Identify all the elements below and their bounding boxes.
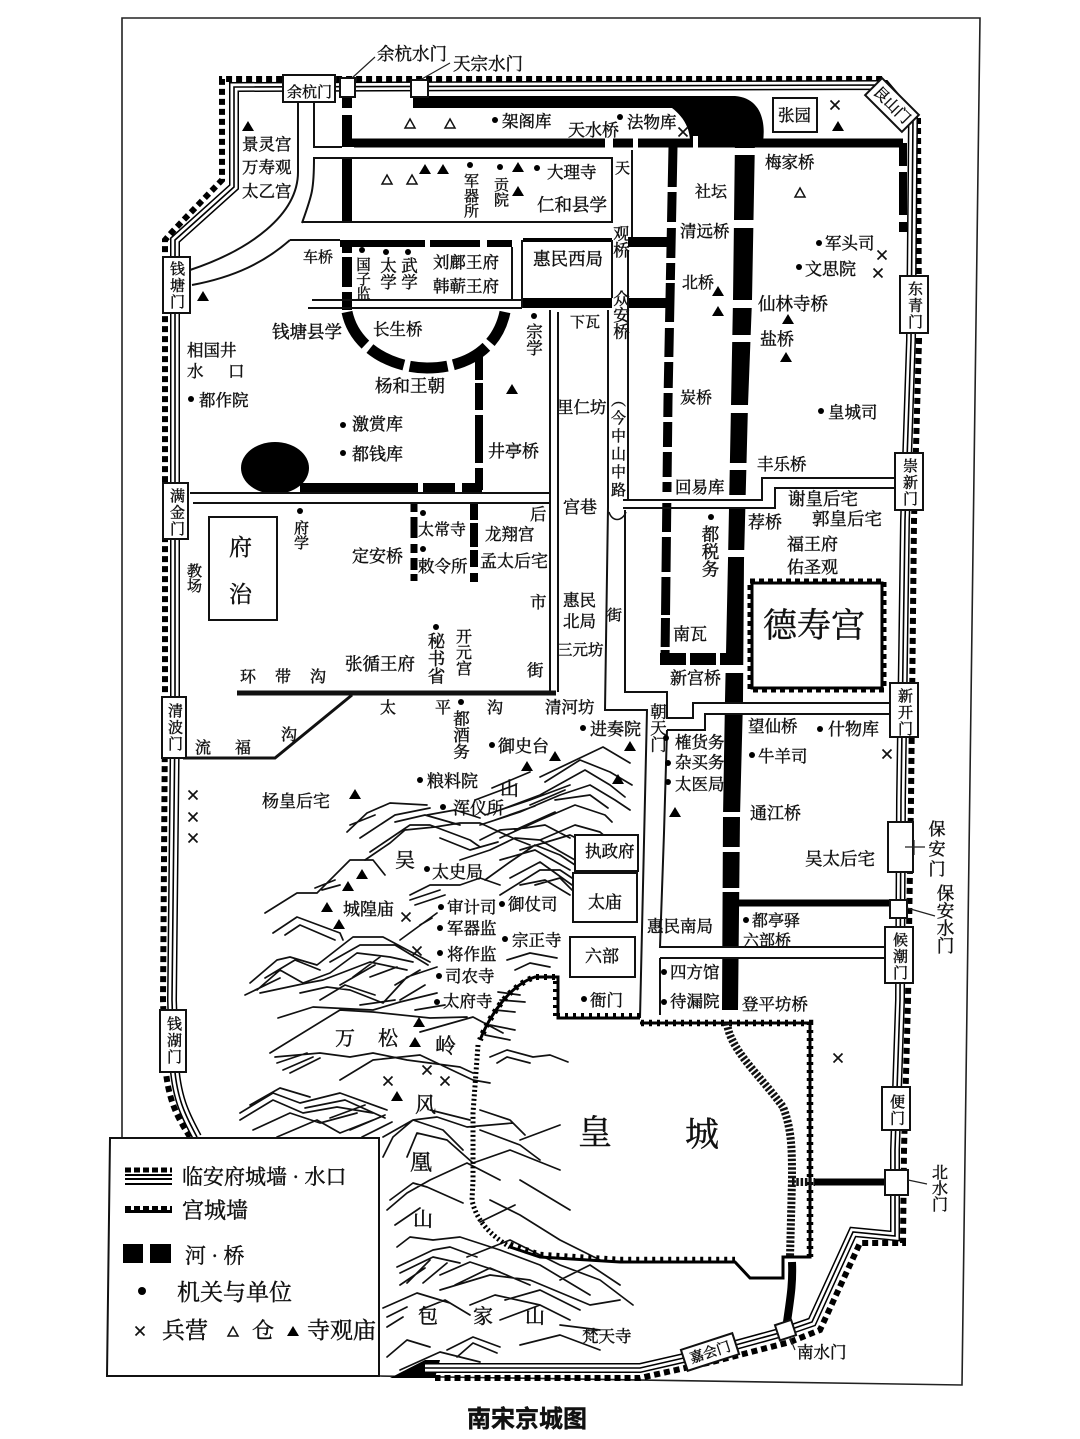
place names north block vertical: （今中山中路 (609, 392, 626, 500)
place names: north-east: 北桥 (682, 274, 714, 292)
place names: southern hills and palace: 梵天寺 (582, 1327, 632, 1346)
gate: baoan (888, 822, 913, 872)
river: west lake (241, 442, 309, 494)
place names: wu hill: 四方馆 (670, 963, 720, 982)
place names: west: 沟 (310, 668, 326, 686)
place names: west: 定安桥 (352, 547, 403, 566)
legend (107, 1138, 379, 1376)
label: dongqing gate: 东青门 (906, 281, 922, 330)
place names: north-east: 回易库 (675, 478, 724, 497)
river: east links (738, 903, 890, 1182)
box: liubu (570, 937, 635, 977)
river: north canal (352, 138, 903, 148)
place names: north (187, 106, 811, 517)
place names: north-east: 社坛 (695, 183, 728, 201)
place names: west: 孟太后宅 (480, 552, 548, 571)
title: 南宋京城图 (467, 1405, 587, 1433)
place names: central: 杂买务 (675, 753, 724, 772)
place names: west (185, 520, 548, 757)
place names: west: 太 (380, 699, 396, 717)
place names: west: 平 (435, 699, 451, 717)
place names north block horizontal: 车桥 (303, 248, 333, 266)
wall crenels west and north (163, 79, 885, 1137)
place names: central: 北局 (563, 612, 596, 631)
gate: genshan (865, 78, 919, 132)
water gate: yuhang (340, 78, 355, 97)
gates (160, 57, 935, 1371)
place names north block vertical: 贡院 (492, 177, 508, 207)
place names: central: 进奏院 (590, 720, 641, 739)
legend: granary (228, 1318, 274, 1343)
place names north block horizontal: 井亭桥 (488, 442, 539, 461)
place names: north-east (675, 153, 882, 532)
label: bian gate: 便门 (888, 1094, 904, 1127)
label: genshan gate: 艮山门 (870, 83, 914, 127)
palace wall (472, 977, 815, 1278)
label: chongxin gate: 崇新门 (901, 458, 918, 508)
place names: west: 府 (229, 535, 252, 560)
river: thin canal (523, 238, 612, 242)
place names: north-east: 皇城司 (828, 403, 878, 422)
map frame (122, 18, 980, 1385)
road: huandai ditch (237, 690, 556, 696)
place names north block horizontal: 下瓦 (570, 314, 600, 331)
gate: dongqing (900, 276, 928, 333)
wall centre line (172, 85, 913, 1368)
place names: central: 街 (607, 607, 622, 624)
place names: north-east: 军头司 (825, 234, 874, 253)
city wall (163, 79, 919, 1378)
place names: wu hill: 衙门 (590, 991, 623, 1010)
place names north block vertical: 太学 (378, 257, 397, 290)
box: taimiao (573, 873, 637, 922)
place names: north-east: 梅家桥 (765, 153, 814, 172)
river: upper cross canals (522, 242, 672, 303)
place names: west: 流 (195, 739, 211, 757)
river: south branch (474, 350, 479, 582)
road: crossing street (190, 310, 895, 692)
place names: southern hills and palace: 岭 (435, 1034, 456, 1058)
place names: wu hill: 执政府 (585, 842, 634, 861)
water gate: north (885, 1170, 908, 1195)
gate: bian (882, 1087, 910, 1130)
river: north-east canal (899, 143, 907, 232)
place names north block horizontal: 大理寺 (547, 163, 596, 182)
place names: west: 沟 (487, 699, 503, 717)
place names: central: 南瓦 (673, 625, 707, 644)
palace wall north-west crenels (480, 977, 640, 1040)
gate labels (165, 44, 955, 1367)
road: imperial street (605, 150, 890, 1018)
place names north block vertical: 武学 (398, 257, 418, 290)
place names: west: 龙翔宫 (485, 525, 534, 544)
place names north block horizontal: 架阁库 (502, 112, 552, 131)
mountain ridges: fenghuang hill (240, 1050, 568, 1170)
place names: wu hill: 宗正寺 (512, 931, 562, 950)
deshou palace crenels (750, 581, 884, 690)
river: south link (787, 1262, 792, 1322)
place names: central: 什物库 (828, 720, 879, 739)
place names: central: 街 (527, 661, 544, 680)
palace wall east crenels (510, 1023, 810, 1260)
river: lower link (660, 653, 738, 665)
palace inner wall (727, 1023, 792, 1257)
place names north block horizontal: 惠民西局 (533, 249, 603, 269)
water gate: tianzong (411, 80, 428, 97)
markers: institutions, barracks, granaries, temples (188, 100, 892, 1101)
place names: west: 张循王府 (345, 654, 415, 674)
place names north block vertical (354, 160, 630, 500)
place names north block horizontal: 刘鄜王府 (433, 253, 499, 272)
place names: wu hill: 审计司 (447, 898, 496, 917)
label: qianhu gate: 钱湖门 (165, 1016, 182, 1066)
place names: southern hills and palace: 风 (415, 1093, 436, 1117)
legend: palace wall text: 宫城墙 (182, 1198, 248, 1223)
water gate: south (775, 1320, 796, 1340)
place names: wu hill: 登平坊桥 (742, 995, 808, 1014)
deshou palace name: 德寿宫 (763, 607, 865, 645)
place names: west: 带 (275, 668, 291, 686)
label: baoan gate: 保安门 (926, 820, 945, 880)
place names north block vertical: 国子监 (354, 257, 370, 300)
place names north block vertical: 天 (613, 160, 630, 175)
road: street bubble (609, 512, 626, 520)
temple triangles (197, 121, 844, 1101)
place names: southern hills and palace: 包 (418, 1305, 438, 1328)
palace wall west dotted (472, 1045, 510, 1247)
place names: north-east: 清远桥 (680, 222, 730, 241)
place names: central: 望仙桥 (748, 717, 798, 736)
palace wall south and east line (510, 1023, 810, 1278)
place names north block horizontal: 仁和县学 (537, 195, 607, 215)
place names: wu hill: 将作监 (447, 945, 496, 964)
place names north block horizontal: 宫巷 (563, 498, 597, 517)
place names: wu hill: 山 (500, 778, 519, 800)
place names: wu hill: 太史局 (432, 863, 483, 882)
legend: palace wall sample (125, 1208, 172, 1212)
place names north block horizontal (187, 106, 811, 517)
place names north block horizontal: 相国井 (187, 341, 236, 360)
place names north block horizontal: 太乙宫 (242, 182, 292, 201)
gate: yuhang (283, 75, 335, 102)
place names: north-east: 丰乐桥 (757, 455, 806, 474)
place names north block horizontal: 里仁坊 (557, 398, 606, 417)
place names: west: 府学 (292, 520, 308, 550)
place names: central: 吴太后宅 (805, 849, 875, 869)
place names: wu hill: 粮料院 (427, 772, 478, 791)
place names: southern hills and palace: 山 (525, 1305, 545, 1328)
wall outer band (172, 85, 913, 1368)
label: yuhang gate: 余杭门 (287, 83, 332, 101)
label: north water gate: 北水门 (930, 1164, 948, 1212)
place names: wu hill: 都亭驿 (752, 912, 800, 930)
place names: central: 榷货务 (675, 733, 724, 752)
palace: deshou (750, 581, 884, 690)
gate: xinkai (890, 683, 918, 737)
place names: wu hill: 待漏院 (670, 992, 720, 1011)
place names north block vertical: 军器所 (462, 173, 478, 218)
place names north block horizontal: 都钱库 (352, 445, 403, 464)
place names north block horizontal: 张园 (778, 106, 811, 125)
legend: city wall text: 临安府城墙 · 水口 (182, 1165, 346, 1189)
place names: southern hills and palace: 皇 (578, 1114, 612, 1152)
place names: central: 惠民 (563, 591, 596, 610)
gate leader lines (352, 57, 935, 1350)
place names: north-east: 郭皇后宅 (812, 509, 882, 529)
place names: west: 环 (240, 668, 257, 686)
place names: wu hill: 太府寺 (443, 992, 492, 1011)
place names: wu hill: 吴 (395, 849, 415, 872)
place names: central: 通江桥 (750, 804, 801, 823)
place names: wu hill: 司农寺 (445, 967, 494, 986)
place names: central: 牛羊司 (758, 747, 808, 766)
river: arc canal (347, 312, 505, 368)
river: middle canal (665, 147, 673, 660)
label: yuhang water gate: 余杭水门 (377, 44, 447, 64)
label: baoan water gate: 保安水门 (935, 884, 955, 954)
box: fuzhi (209, 517, 277, 620)
label: jiahui gate: 嘉会门 (688, 1338, 733, 1367)
place names: central: 清河坊 (545, 698, 594, 717)
place names: central (527, 505, 879, 869)
box: zhangyuan (773, 98, 817, 132)
place names north block vertical: 众安桥 (610, 290, 630, 340)
legend: institution text: 机关与单位 (177, 1280, 292, 1305)
river: cross canal (340, 240, 512, 247)
place names: central: 市 (530, 593, 546, 612)
gate: qingbo (162, 697, 186, 758)
place names north block horizontal: 万寿观 (242, 158, 292, 177)
place names: north-east: 炭桥 (680, 389, 712, 407)
label: houchao gate: 候潮门 (891, 932, 908, 982)
legend: barracks (136, 1318, 208, 1343)
place names: central: 太医局 (675, 775, 724, 794)
legend: river bridge text: 河 · 桥 (185, 1244, 244, 1268)
place names north block horizontal: 都作院 (199, 391, 249, 410)
legend: temple: 寺观庙 (307, 1318, 376, 1343)
place names: wu hill: 御仗司 (508, 895, 558, 914)
place names: southern hills and palace: 家 (473, 1305, 493, 1328)
water gate: baoan (890, 900, 907, 918)
place names: wu hill: 惠民南局 (647, 917, 713, 936)
place names: west: 太常寺 (418, 521, 466, 539)
place names: west: 敕令所 (418, 557, 468, 576)
legend: city wall sample (125, 1170, 172, 1184)
place names: west: 福 (235, 739, 251, 757)
wall crenels east and south (435, 118, 919, 1378)
roads (183, 103, 895, 1018)
place names north block horizontal: 韩蕲王府 (433, 276, 499, 296)
place names: wu hill: 军器监 (447, 919, 496, 938)
place names: central: 朝天门 (648, 703, 667, 753)
wall corner wedge (390, 1360, 440, 1378)
place names: north-east: 盐桥 (760, 330, 794, 349)
place names: west: 开元宫 (454, 628, 472, 676)
gate: jiahui (681, 1333, 739, 1371)
place names: southern hills and palace: 凰 (410, 1150, 432, 1175)
government boxes (209, 98, 817, 977)
place names: north-east: 谢皇后宅 (788, 489, 858, 509)
place names north block horizontal: 口 (228, 362, 244, 381)
place names: wu hill: 浑仪所 (453, 799, 504, 818)
label: south water gate: 南水门 (797, 1343, 846, 1362)
place names: southern hills and palace: 城 (685, 1117, 719, 1154)
place names: wu hill: 都酒务 (450, 710, 470, 760)
palace wall north-west line (480, 977, 640, 1040)
place names: north-east: 仙林寺桥 (758, 294, 828, 314)
place names north block horizontal: 钱塘县学 (272, 322, 342, 342)
palace link (792, 1178, 815, 1186)
mountain ridges: baojia hill (383, 1163, 633, 1370)
legend: granary: 仓 (252, 1318, 274, 1343)
label: xinkai gate: 新开门 (896, 688, 912, 738)
place names north block horizontal: 杨和王朝 (375, 376, 445, 396)
place names: central: 后 (530, 505, 546, 524)
wall white band (172, 85, 913, 1368)
legend box (107, 1138, 379, 1376)
river: north moat and lake (413, 96, 764, 142)
place names: central: 都税务 (700, 525, 720, 578)
place names: central: 三元坊 (557, 641, 604, 659)
place names: west: 教场 (185, 563, 202, 593)
river: west canal upper (342, 97, 352, 310)
place names north block horizontal: 天水桥 (568, 121, 619, 140)
institution dots (188, 114, 824, 1005)
place names: wu hill: 御史台 (498, 737, 549, 756)
place names: central: 佑圣观 (787, 558, 838, 577)
barracks crosses (188, 100, 892, 1086)
place names: wu hill: 杨皇后宅 (262, 791, 330, 811)
legend: barracks: 兵营 (162, 1318, 208, 1343)
gate: chongxin (895, 453, 923, 510)
rivers and bridges (241, 96, 911, 1322)
bridge gaps (340, 108, 911, 958)
place names: west: 秘书省 (426, 632, 446, 684)
road: northern blocks (290, 103, 612, 308)
mountains (240, 747, 633, 1370)
granary triangles (382, 119, 805, 197)
place names: southern hills and palace: 松 (378, 1027, 399, 1050)
mountain ridges: wansong ridge (245, 860, 557, 1053)
label: qiantang gate: 钱塘门 (168, 261, 184, 310)
place names: southern hills and palace (335, 1027, 719, 1346)
place names: north-east: 荐桥 (748, 513, 782, 532)
place names north block horizontal: 水 (187, 362, 204, 381)
road: ditches (183, 695, 352, 758)
place names north block horizontal: 长生桥 (373, 320, 422, 339)
river: main canal (722, 138, 755, 1010)
place names north block vertical: 观桥 (610, 225, 630, 258)
place names: west: 沟 (281, 726, 297, 744)
place names: southern hills and palace: 山 (413, 1208, 433, 1231)
label: tianzong water gate: 天宗水门 (453, 54, 523, 74)
gate: houchao (885, 927, 913, 983)
place names: wu hill: 太庙 (588, 893, 622, 912)
mountain ridges: wu hill (347, 747, 632, 895)
river: lake outflow (300, 483, 482, 492)
gate: qiantang (163, 257, 190, 313)
legend: river bridge sample (123, 1244, 171, 1263)
place names north block horizontal: 法物库 (627, 113, 676, 132)
gate: manjin (163, 483, 188, 539)
place names: central: 福王府 (787, 535, 838, 554)
place names: southern hills and palace: 万 (335, 1028, 355, 1050)
place names north block horizontal: 激赏库 (352, 415, 403, 434)
place names north block horizontal: 景灵宫 (242, 135, 292, 154)
deshou palace wall (752, 583, 882, 688)
place names: north-east: 文思院 (805, 260, 856, 279)
place names: wu hill: 城隍庙 (343, 900, 394, 919)
label: qingbo gate: 清波门 (166, 703, 182, 752)
label: manjin gate: 满金门 (168, 488, 184, 538)
place names: wu hill: 六部桥 (743, 932, 791, 950)
river: short branch (410, 503, 418, 581)
place names north block vertical: 宗学 (524, 323, 543, 356)
place names: wu hill: 六部 (585, 947, 619, 966)
place names: central: 新宫桥 (670, 669, 721, 688)
place names: west: 治 (229, 582, 253, 607)
gate: qianhu (160, 1010, 186, 1072)
legend: institution dot (138, 1287, 146, 1295)
place names: wu hill (262, 710, 808, 1014)
road: west curved (190, 103, 298, 285)
box: zhengfu (575, 835, 638, 871)
